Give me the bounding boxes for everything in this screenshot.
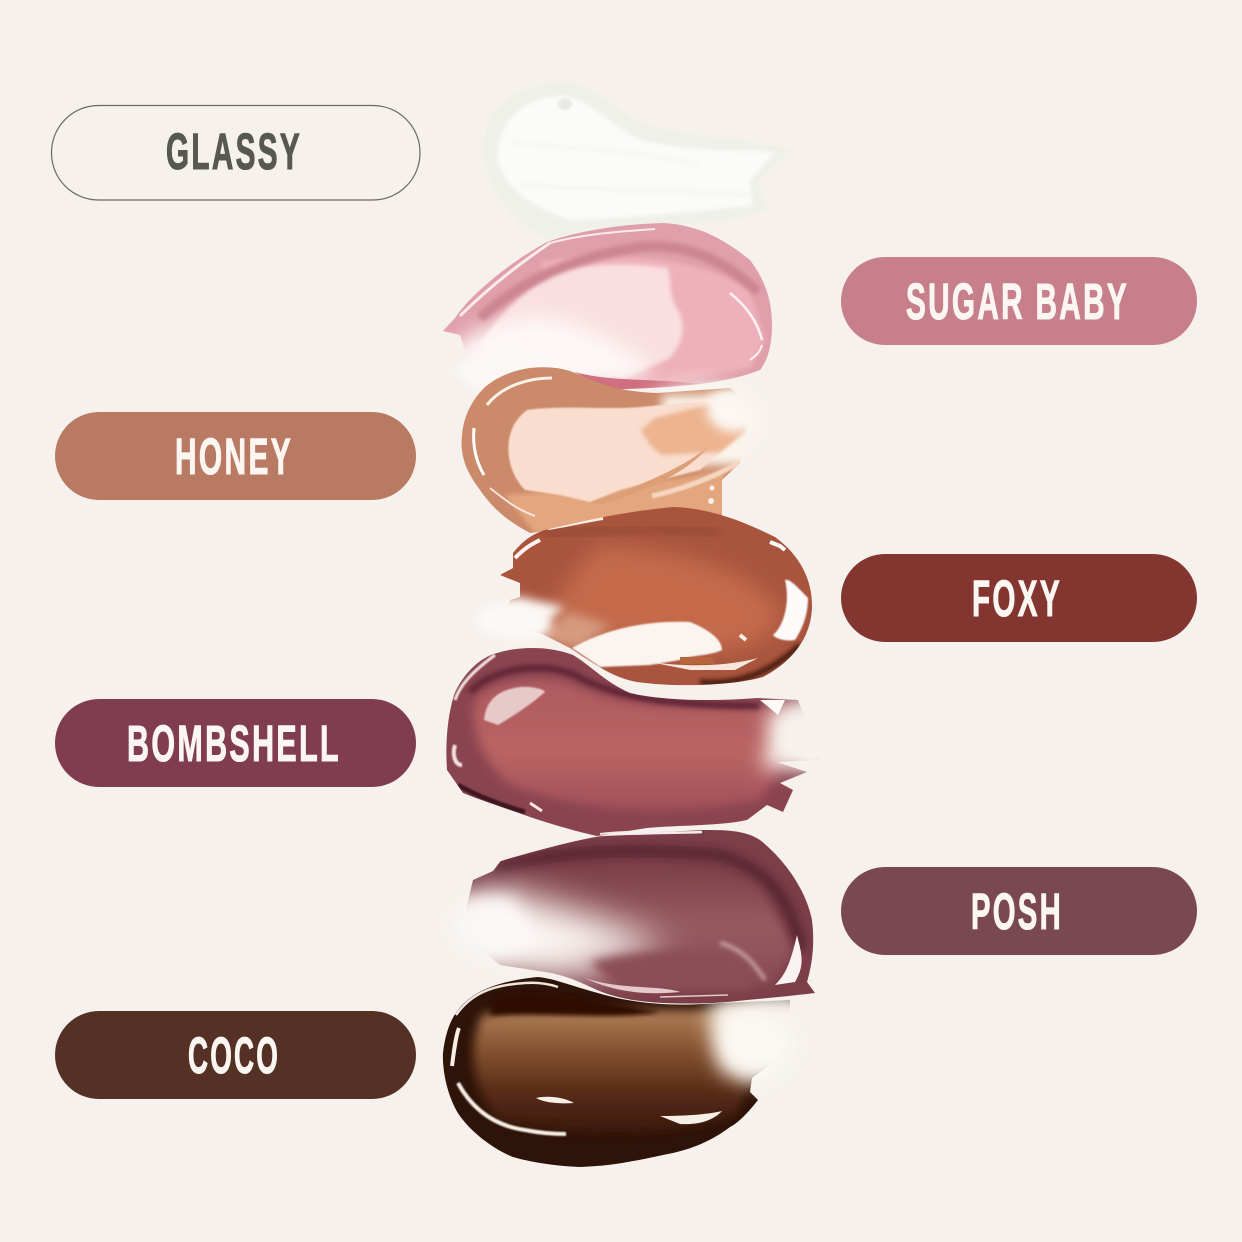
pill: Honey: HONEY xyxy=(175,428,293,485)
pill: Coco xyxy=(55,1011,416,1099)
pill: Glassy xyxy=(52,106,420,200)
pill: Posh: POSH xyxy=(971,883,1063,940)
pill: Bombshell: BOMBSHELL xyxy=(127,715,341,772)
swatch: posh xyxy=(467,830,815,1004)
pill: Glassy: GLASSY xyxy=(166,123,302,180)
pill: Posh xyxy=(841,867,1197,955)
swatch: sugar baby xyxy=(440,220,780,395)
swatch: glassy xyxy=(500,98,769,218)
swatch: bombshell xyxy=(446,648,820,836)
pill: Foxy xyxy=(841,554,1197,642)
pill: Coco: COCO xyxy=(188,1027,280,1084)
swatch: honey xyxy=(462,367,747,533)
pill: Sugar Baby xyxy=(841,257,1197,345)
pill: Foxy: FOXY xyxy=(972,570,1062,627)
pill: Bombshell xyxy=(55,699,416,787)
pill: Honey xyxy=(55,412,416,500)
swatch: coco xyxy=(442,977,790,1167)
swatch: foxy xyxy=(500,507,812,686)
